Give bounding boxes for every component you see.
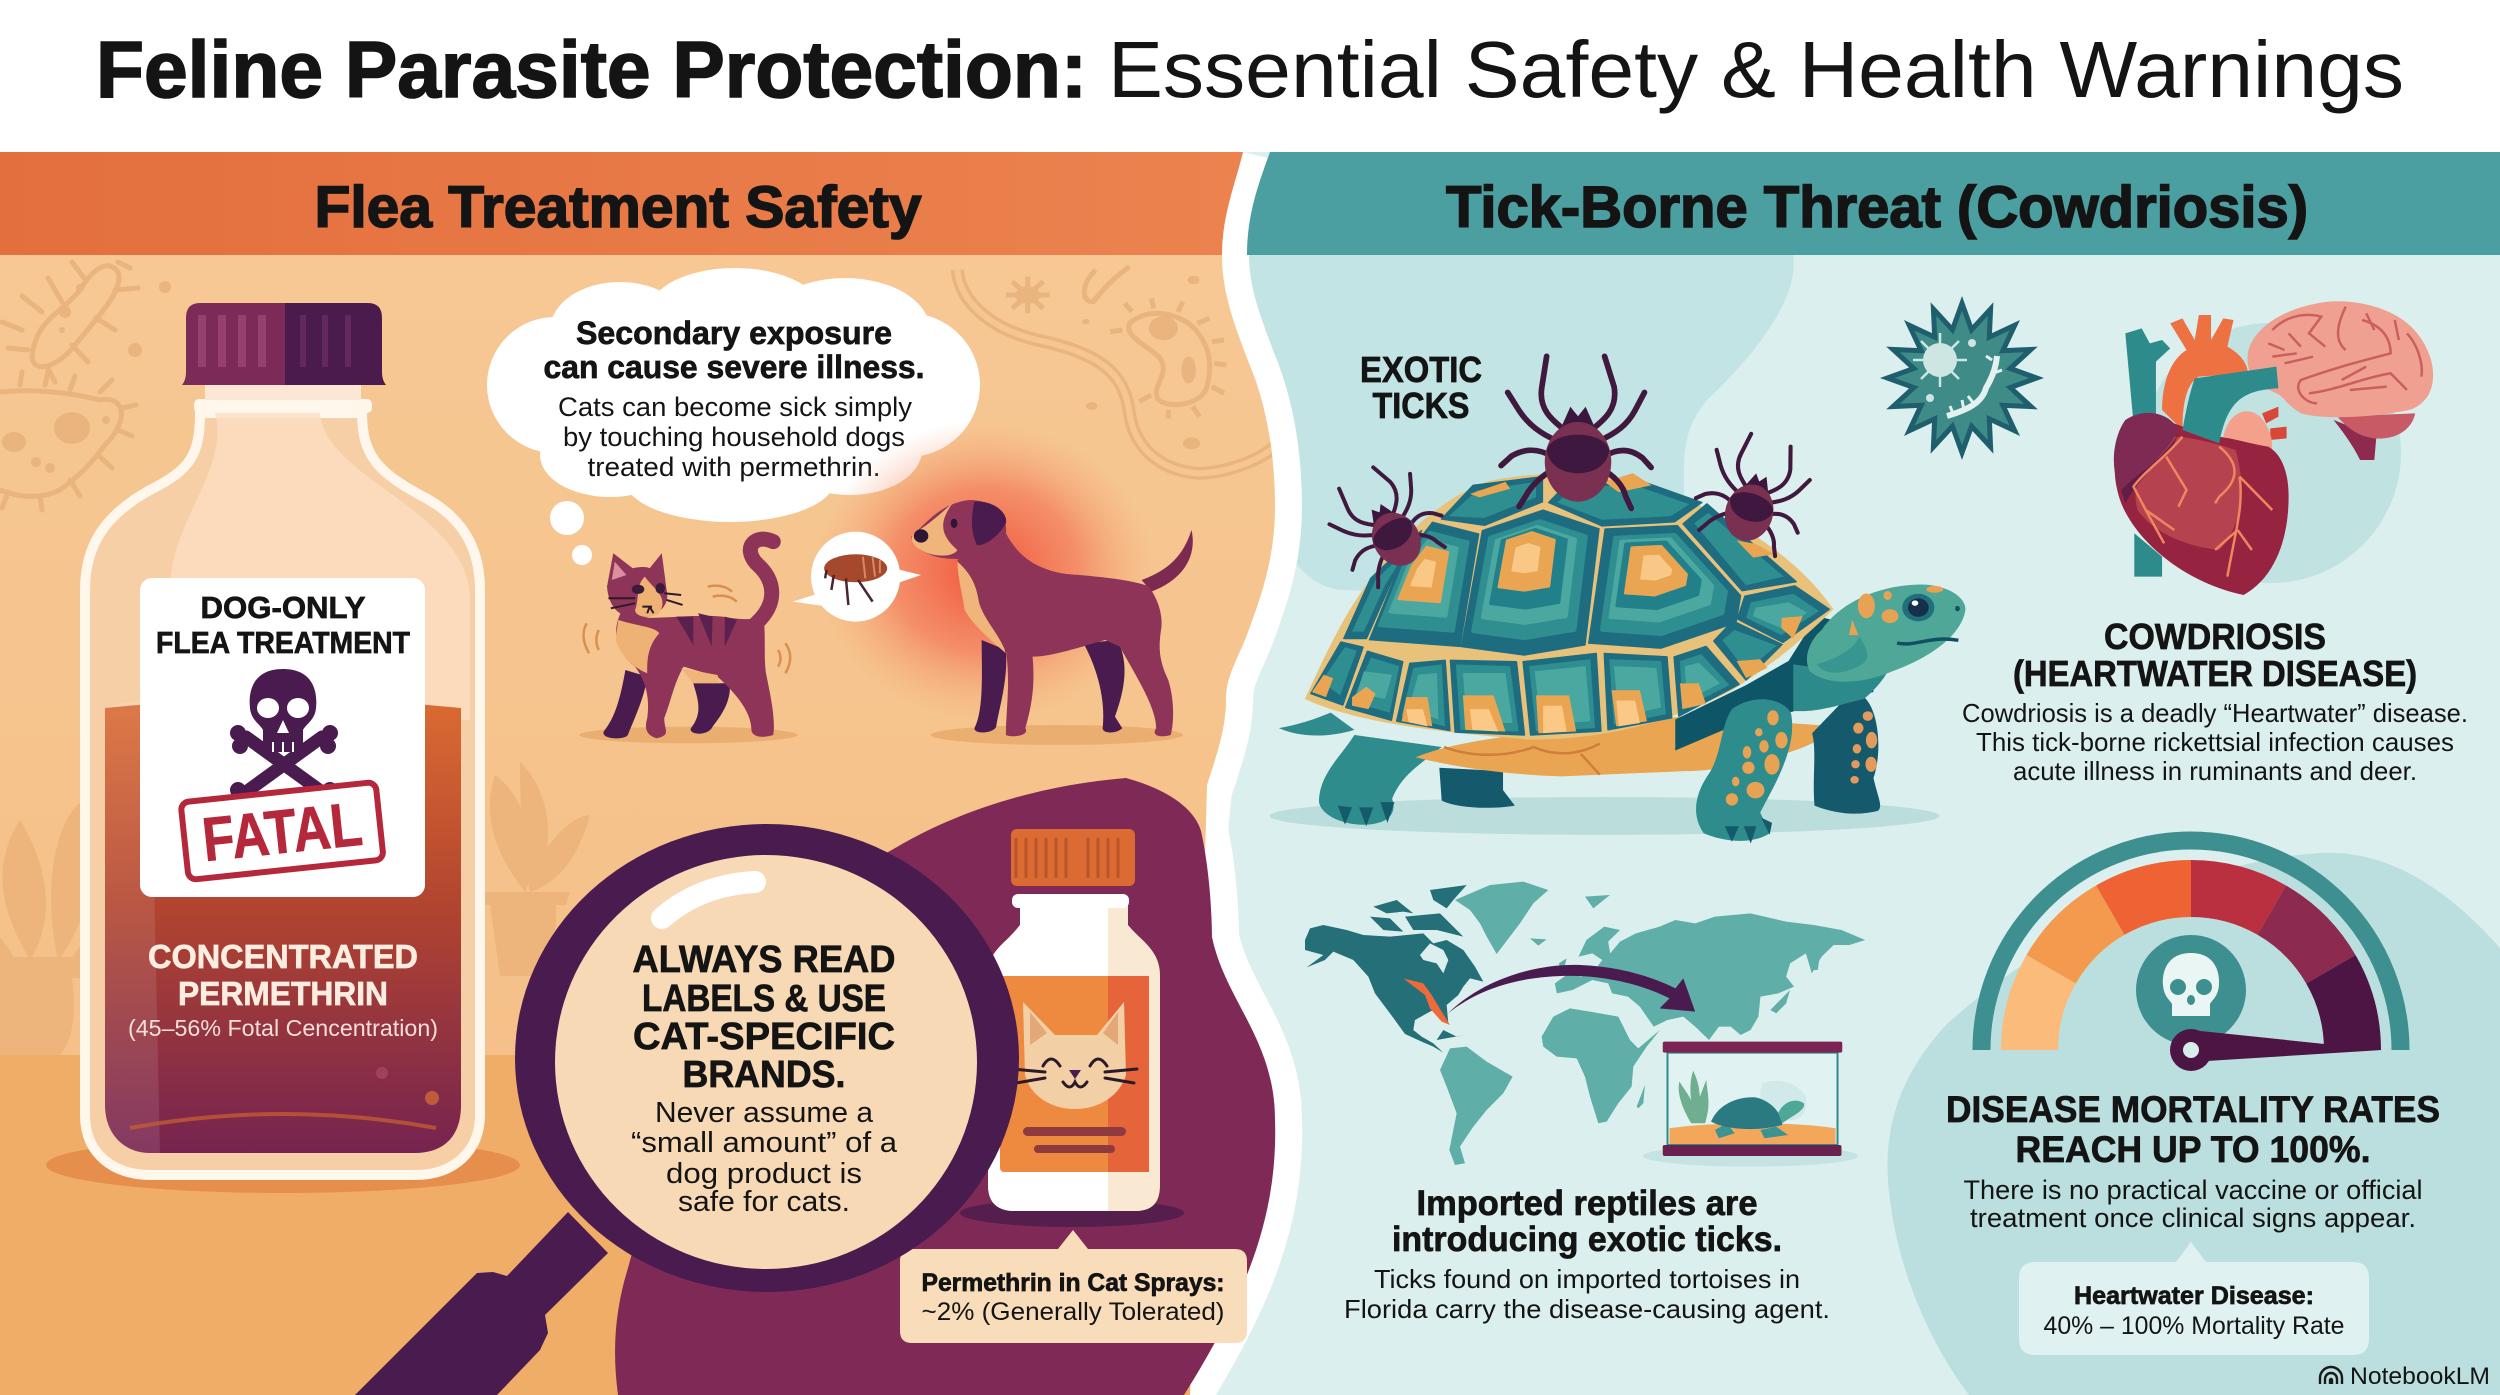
- callout: thought cloud: by touching household dogs: [563, 422, 905, 452]
- map: florida streak: [1403, 978, 1450, 1025]
- text: cowdriosis: COWDRIOSIS: [2104, 616, 2326, 657]
- label: exotic ticks: [1360, 349, 1482, 426]
- cap: [1011, 829, 1135, 886]
- gauge segments: [2001, 860, 2381, 1050]
- callout: thought cloud: [487, 268, 980, 565]
- background germs right: [957, 267, 1275, 473]
- background plant right: [483, 762, 590, 976]
- bottle liquid text: [128, 938, 438, 1041]
- title: Essential Safety & Health Warnings: [1108, 25, 2404, 114]
- floor: [0, 1055, 1300, 1395]
- map: greenland, south america, africa: [1440, 882, 1660, 1165]
- illustration: tortoise: [1269, 473, 1965, 843]
- bottle shadow: [46, 1149, 520, 1193]
- gauge: mortality: [1982, 841, 2400, 1071]
- text: cowdriosis: [1962, 616, 2468, 786]
- text: disease mortality rates: REACH UP TO 100%.: [2016, 1129, 2370, 1170]
- callout: thought cloud: can cause severe illness.: [544, 349, 924, 385]
- text: disease mortality rates: [1946, 1089, 2440, 1233]
- lens text: dog product is: [666, 1158, 862, 1190]
- heading: tick-borne threat: Tick-Borne Threat (Cowdriosis): [1446, 175, 2308, 240]
- title: Feline Parasite Protection:: [96, 25, 1087, 114]
- body: [988, 905, 1160, 1211]
- label: exotic ticks: EXOTIC: [1360, 349, 1482, 390]
- world map with terrarium: [1305, 882, 1865, 1167]
- shell: [1305, 473, 1833, 739]
- icon: dog: [911, 500, 1193, 736]
- title: [96, 25, 2404, 114]
- lens text: [631, 939, 898, 1218]
- purple blob: [615, 778, 1275, 1395]
- text: disease mortality rates: treatment once clinical signs appear.: [1970, 1203, 2416, 1233]
- text: cowdriosis: (HEARTWATER DISEASE): [2013, 653, 2417, 694]
- text: cowdriosis: acute illness in ruminants and deer.: [2013, 756, 2417, 786]
- handle: [355, 1212, 608, 1395]
- panel divider white curve: [1184, 152, 1275, 1395]
- text: imported reptiles: Florida carry the disease-causing agent.: [1344, 1294, 1830, 1324]
- bottle liquid text: PERMETHRIN: [178, 975, 388, 1012]
- liquid: [105, 699, 461, 1153]
- magnifying glass: [355, 824, 1019, 1395]
- brain: [2334, 420, 2376, 460]
- map: north america: [1305, 885, 1483, 1053]
- gauge needle: [2170, 1029, 2382, 1071]
- panel: tick-borne threat background: [1200, 152, 2500, 1395]
- callout: thought cloud: Cats can become sick simply: [558, 392, 912, 422]
- bottle label: FLEA TREATMENT: [156, 625, 410, 660]
- bottle cap: [182, 303, 386, 385]
- callout: permethrin in cat sprays: ~2% (Generally Tolerated): [922, 1298, 1224, 1326]
- text: imported reptiles: Ticks found on imported tortoises in: [1374, 1264, 1800, 1294]
- background plant left: [0, 803, 80, 1055]
- lens text: CAT-SPECIFIC: [633, 1016, 895, 1058]
- illustration: heart and brain: [2114, 301, 2433, 595]
- bottle liquid text: CONCENTRATED: [148, 938, 418, 975]
- lens text: “small amount” of a: [631, 1127, 898, 1159]
- icon: ticks on shell: [1312, 356, 1822, 595]
- callout: thought cloud: treated with permethrin.: [588, 452, 880, 482]
- heart: [2125, 328, 2170, 423]
- header band: flea: [0, 152, 1300, 255]
- icon: happy cat face: [1012, 1002, 1137, 1109]
- text: cowdriosis: This tick-borne rickettsial infection causes: [1976, 727, 2454, 757]
- terrarium: [1643, 1042, 1858, 1167]
- red glow around dog: [842, 428, 1134, 701]
- central scutes: [1461, 509, 1600, 656]
- map: americas, africa, islands: [1305, 882, 1660, 1165]
- bottle label: DOG-ONLY: [200, 590, 366, 625]
- icon: flea speech bubble: [793, 532, 921, 622]
- highlight: [662, 882, 755, 918]
- lens text: LABELS & USE: [642, 978, 886, 1020]
- text: imported reptiles: [1344, 1184, 1830, 1324]
- header band: tick-borne: [1247, 152, 2500, 255]
- bottle label: [140, 578, 425, 897]
- icon: cat: [584, 539, 790, 738]
- illustration: cat and dog: [579, 500, 1193, 745]
- watermark: notebooklm: NotebookLM: [2350, 1363, 2490, 1390]
- lens: [555, 855, 977, 1269]
- callout: heartwater mortality: Heartwater Disease:: [2074, 1282, 2314, 1310]
- text: imported reptiles: Imported reptiles are: [1416, 1184, 1758, 1223]
- heading: flea treatment safety: Flea Treatment Safety: [314, 175, 922, 240]
- background germs left: [0, 262, 138, 510]
- ring: [515, 824, 1019, 1292]
- label: [1000, 976, 1149, 1172]
- lens text: BRANDS.: [682, 1054, 846, 1096]
- callout: permethrin in cat sprays: [900, 1230, 1247, 1343]
- bottle shadow: [960, 1199, 1184, 1227]
- lens text: ALWAYS READ: [632, 939, 896, 981]
- text: cowdriosis: Cowdriosis is a deadly “Heartwater” disease.: [1962, 698, 2468, 728]
- text: disease mortality rates: There is no practical vaccine or official: [1964, 1175, 2422, 1205]
- small bottle: cat-specific brand: [960, 829, 1184, 1227]
- text: disease mortality rates: DISEASE MORTALITY RATES: [1946, 1089, 2440, 1130]
- callout: heartwater mortality: 40% – 100% Mortality Rate: [2044, 1312, 2344, 1340]
- panel: flea treatment safety: [0, 152, 1300, 1395]
- bottle glass: [85, 413, 480, 1175]
- callout: heartwater mortality: [2019, 1242, 2369, 1355]
- icon: skull in circle: [2136, 935, 2246, 1045]
- lens text: Never assume a: [655, 1097, 874, 1129]
- stamp: fatal: FATAL: [199, 790, 365, 875]
- arrow: import route: [1448, 965, 1695, 1013]
- callout: permethrin in cat sprays: Permethrin in Cat Sprays:: [922, 1269, 1224, 1297]
- gauge outer arc: [1982, 841, 2400, 1050]
- callout: thought cloud: Secondary exposure: [576, 315, 892, 351]
- bottle: dog-only flea treatment: [85, 303, 480, 1175]
- icon: skull and crossbones: [230, 669, 338, 807]
- map: eurasia: [1448, 913, 1865, 1167]
- lens text: safe for cats.: [678, 1186, 850, 1218]
- text: imported reptiles: introducing exotic ticks.: [1392, 1220, 1782, 1259]
- bottle liquid text: (45–56% Fotal Cencentration): [128, 1015, 438, 1041]
- label: exotic ticks: TICKS: [1372, 385, 1470, 426]
- neck ring: [194, 399, 372, 413]
- icon: rickettsia germ: [1880, 296, 2044, 460]
